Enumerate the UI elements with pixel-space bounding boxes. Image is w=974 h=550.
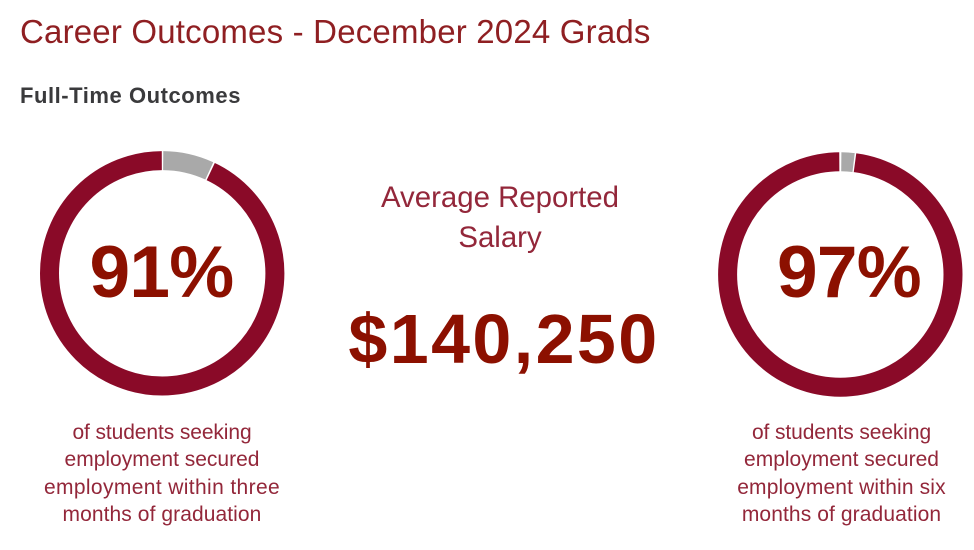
caption: three months: employment secured	[65, 448, 259, 471]
donut value: 97%: 97%	[777, 232, 921, 313]
caption: three months: of students seeking	[72, 420, 252, 444]
caption: six months	[737, 420, 946, 526]
salary label: Average Reported	[381, 181, 619, 214]
caption: three months: employment within three	[44, 476, 280, 499]
title: Career Outcomes - December 2024 Grads	[20, 13, 651, 50]
subheading: Full-Time Outcomes	[20, 83, 241, 108]
salary value: $140,250	[348, 300, 660, 378]
caption: six months: employment within six	[737, 476, 946, 499]
donut chart: 91%	[40, 151, 284, 396]
caption: three months	[44, 420, 280, 526]
donut value: 91%: 91%	[89, 232, 234, 313]
caption: three months: months of graduation	[63, 503, 261, 526]
salary label: Salary	[458, 221, 542, 254]
salary label	[381, 181, 619, 254]
caption: six months: months of graduation	[742, 503, 941, 526]
caption: six months: employment secured	[744, 448, 939, 471]
caption: six months: of students seeking	[752, 420, 931, 444]
donut chart: 97%	[718, 152, 962, 397]
